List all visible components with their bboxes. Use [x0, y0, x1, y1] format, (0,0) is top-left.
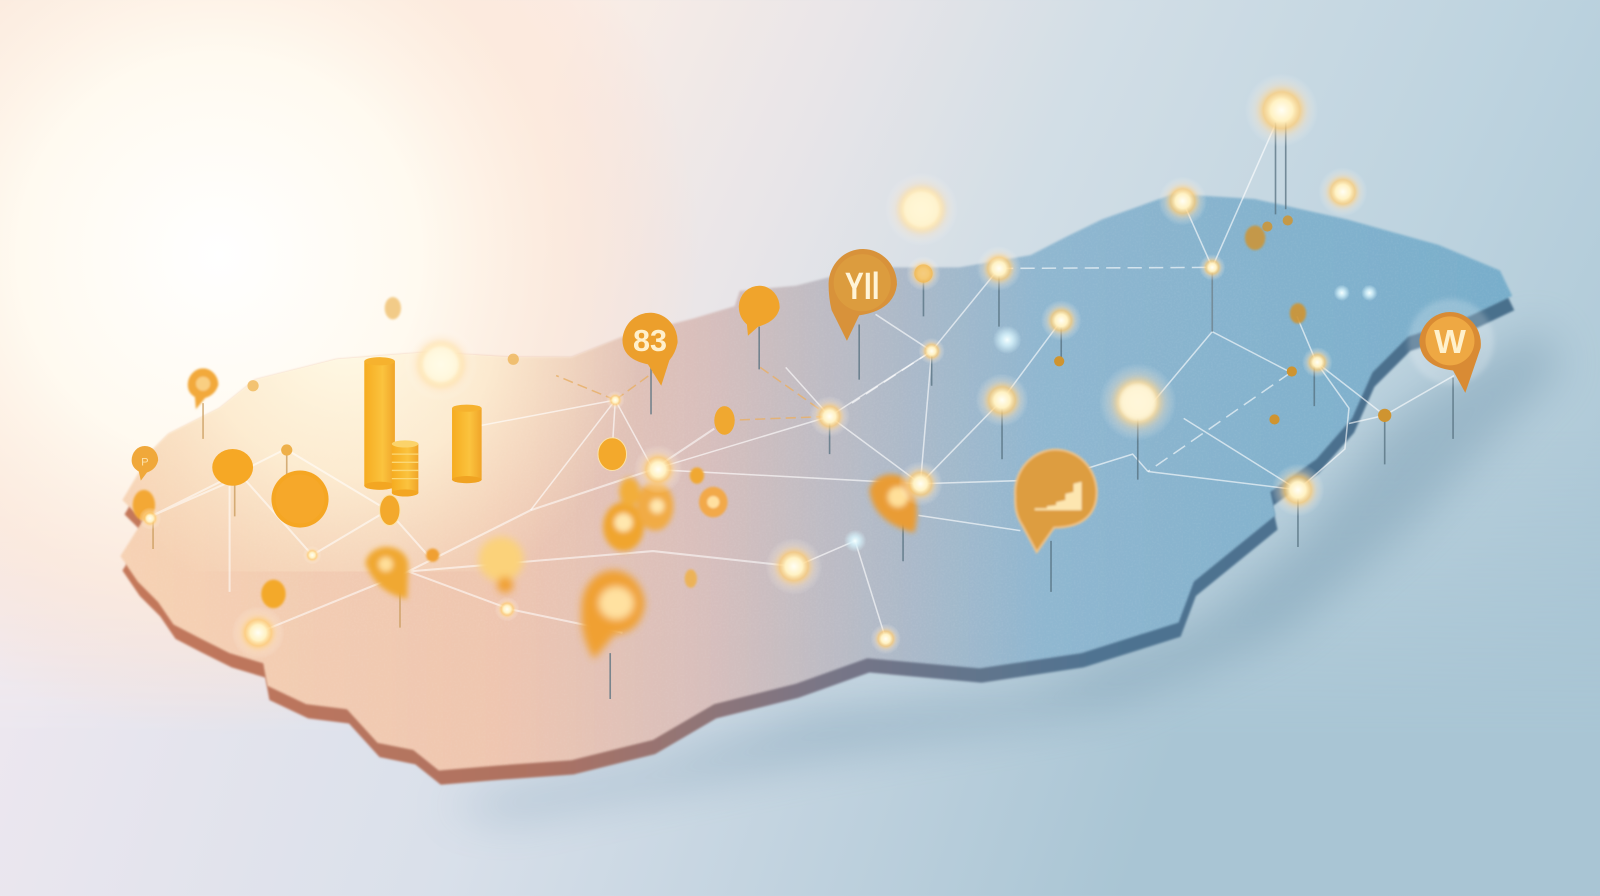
short bar — [452, 405, 482, 483]
round coins — [212, 297, 735, 608]
map shadow — [439, 327, 1561, 816]
stems — [610, 122, 1453, 699]
pin: flower — [622, 313, 678, 386]
pin: Y chart: YIl — [845, 265, 880, 307]
pin: pale blurred — [479, 537, 523, 593]
pin: plain orange — [739, 286, 780, 336]
map side edge — [122, 208, 1514, 785]
pin: flower: 83 — [633, 324, 667, 358]
bar chart: gold coin stacks — [364, 357, 482, 496]
pin: left small lower: P — [141, 456, 149, 468]
pin: bar chart — [1015, 450, 1097, 552]
coin stack — [392, 440, 418, 496]
pin: small orange blurred — [699, 487, 728, 517]
map top surface — [120, 194, 1512, 770]
pin: cluster blurred — [603, 478, 673, 551]
pin: left small lower — [132, 446, 158, 481]
pin: left small top — [188, 368, 218, 409]
map slab — [102, 184, 1531, 796]
pin: Y chart — [829, 249, 897, 341]
pin: blurred centre — [869, 474, 917, 533]
tall bar — [364, 357, 395, 490]
small gold pins on blue area — [1054, 215, 1391, 425]
pin: lower left blurred — [365, 547, 408, 599]
pin: left edge blurred — [133, 490, 155, 520]
pin: foreground blurred — [581, 570, 645, 659]
pin: W — [1408, 299, 1494, 393]
network lines — [153, 110, 1454, 639]
pin: W: W — [1434, 324, 1466, 361]
glowing nodes — [139, 74, 1378, 659]
